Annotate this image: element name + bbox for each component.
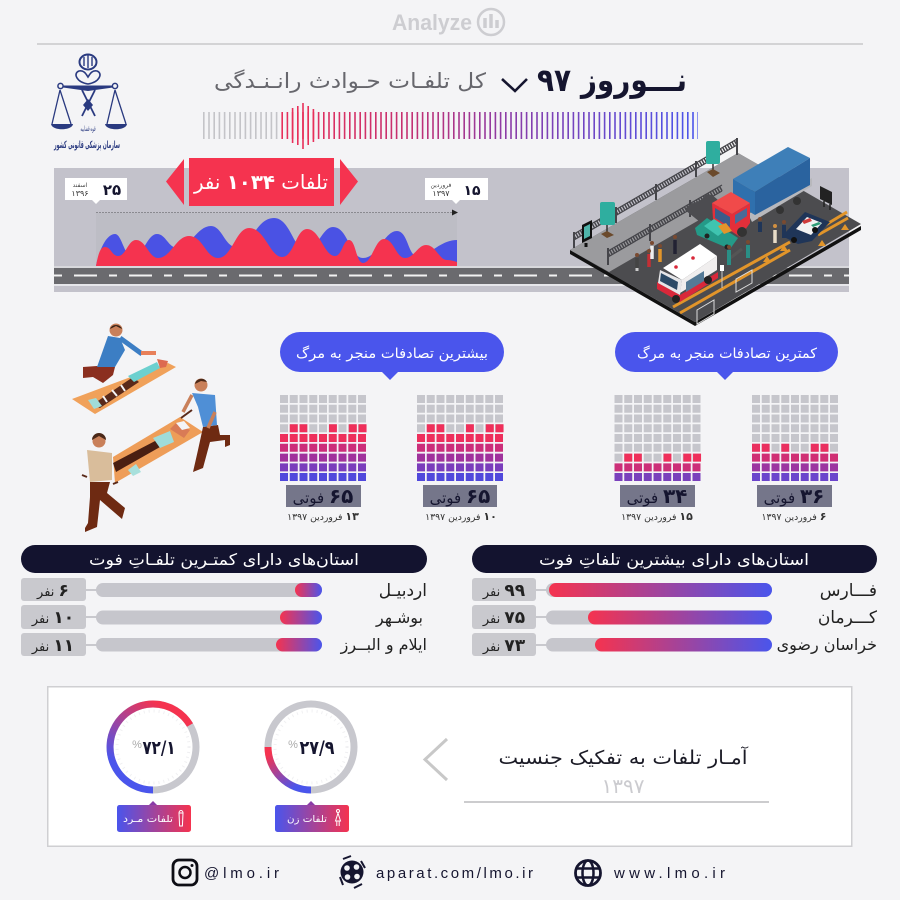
stat box: 65 deaths, 10 farvardin: ۶۵ فوتی — [430, 484, 490, 508]
waffle: 13 farvardin, 65 deaths — [280, 399, 367, 477]
bar chart: lowest provinces: اردبیـل — [379, 581, 427, 601]
donut: women: ۲۷/۹ — [300, 737, 335, 759]
bar chart: highest provinces: ۷۵ نفر — [482, 608, 525, 628]
arrow: chevron left — [425, 739, 447, 780]
bar chart: lowest provinces — [21, 578, 427, 656]
social: aparat: aparat.com/lmo.ir — [376, 865, 533, 882]
bystanders — [635, 258, 639, 268]
tag: men casualties — [117, 801, 191, 832]
heading: provinces with highest deaths: استان‌های دارای بیشترین تلفاتِ فوت — [539, 550, 809, 570]
stat box: 65 deaths, 10 farvardin — [423, 484, 497, 523]
bar chart: lowest provinces: ۶ نفر — [36, 581, 69, 601]
callout: least fatal accidents — [615, 332, 838, 380]
waffle: 10 farvardin, 65 deaths — [417, 399, 504, 477]
donut: women — [268, 704, 354, 790]
ambulance — [657, 272, 718, 302]
tag: women casualties — [275, 801, 349, 832]
icon: chevron down — [502, 79, 527, 91]
date tag: 25 esfand 1396: اسفند — [73, 182, 88, 189]
stat box: 36 deaths, 6 farvardin: ۶ فروردین ۱۳۹۷ — [762, 510, 826, 523]
date tag: 15 farvardin 1397 — [425, 178, 488, 204]
police car — [782, 212, 830, 244]
date tag: 25 esfand 1396 — [65, 178, 127, 204]
bar chart: highest provinces: ۹۹ نفر — [482, 581, 526, 601]
date tag: 15 farvardin 1397: ۱۳۹۷ — [432, 189, 450, 198]
tag: women casualties: تلفات زن — [287, 814, 327, 825]
bar chart: highest provinces: ۷۳ نفر — [482, 636, 526, 656]
date tag: 15 farvardin 1397: ۱۵ — [463, 183, 481, 199]
teal car — [695, 218, 738, 249]
donut: men: % — [132, 739, 142, 751]
date tag: 15 farvardin 1397: فروردین — [431, 182, 452, 189]
stat box: 36 deaths, 6 farvardin — [757, 484, 832, 523]
bar chart: lowest provinces: بوشـهر — [375, 608, 423, 628]
stat box: 65 deaths, 13 farvardin — [286, 484, 361, 523]
heading: provinces with lowest deaths — [21, 545, 427, 573]
waveform — [203, 103, 698, 149]
stat box: 34 deaths, 15 farvardin — [620, 484, 695, 523]
stat box: 36 deaths, 6 farvardin: ۳۶ فوتی — [764, 484, 824, 508]
bar chart: highest provinces: خراسان رضوی — [777, 635, 877, 655]
tree signs — [706, 141, 720, 164]
responders — [760, 222, 784, 238]
stat box: 65 deaths, 10 farvardin: ۱۰ فروردین ۱۳۹۷ — [425, 510, 497, 523]
social: aparat — [340, 856, 533, 888]
brand: Analyze: Analyze — [392, 10, 472, 35]
panel: gender breakdown — [48, 687, 852, 846]
callout: most fatal accidents — [280, 332, 504, 380]
illustration: medic kneeling over patient on board — [72, 324, 176, 414]
social: instagram: @lmo.ir — [204, 865, 279, 882]
banner: total casualties: تلفات ۱۰۳۴ نفر — [193, 170, 328, 194]
heading: provinces with lowest deaths: استان‌های دارای کمتـرین تلفـاتِ فوت — [89, 550, 359, 570]
stat box: 34 deaths, 15 farvardin: ۳۴ فوتی — [627, 484, 687, 508]
waffle: 15 farvardin, 34 deaths — [614, 399, 702, 477]
logo: legal medicine organization: قوه قضاییه — [80, 125, 96, 133]
road sign — [721, 268, 723, 288]
stat box: 34 deaths, 15 farvardin: ۱۵ فروردین ۱۳۹۷ — [621, 510, 693, 523]
title: نـــوروز ۹۷ — [537, 61, 687, 99]
section title: gender statistics — [464, 745, 769, 802]
illustration: isometric road accident — [570, 138, 861, 326]
section title: gender statistics: آمـار تلفات به تفکیک جنسیت — [498, 745, 748, 769]
banner: total casualties — [166, 158, 358, 206]
social: website — [576, 860, 725, 886]
social: instagram — [173, 860, 279, 885]
bar chart: lowest provinces: ۱۱ نفر — [31, 636, 74, 656]
stat box: 65 deaths, 13 farvardin: ۶۵ فوتی — [293, 484, 353, 508]
medics and stretcher — [729, 249, 742, 259]
stat box: 65 deaths, 13 farvardin: ۱۳ فروردین ۱۳۹۷ — [287, 510, 359, 523]
chart: daily casualties area waves — [96, 218, 457, 266]
callout: most fatal accidents: بیشترین تصادفات منجر به مرگ — [296, 344, 488, 362]
waffle: 6 farvardin, 36 deaths — [752, 399, 839, 477]
panel: road band — [54, 168, 849, 292]
bar chart: lowest provinces: ایلام و البــرز — [340, 635, 427, 655]
axis arrow — [96, 210, 458, 216]
donut: men: ۷۲/۱ — [142, 737, 176, 759]
tag: men casualties: تلفات مـرد — [123, 814, 173, 825]
heading: provinces with highest deaths — [472, 545, 877, 573]
donut: men — [110, 704, 196, 790]
donut: women: % — [288, 739, 298, 751]
social: website: www.lmo.ir — [613, 865, 725, 882]
subtitle: کل تلفـات حـوادث رانـنـدگی — [214, 69, 486, 93]
logo: legal medicine organization — [51, 54, 127, 151]
callout: least fatal accidents: کمترین تصادفات منجر به مرگ — [637, 344, 817, 362]
truck — [748, 178, 812, 222]
bar chart: highest provinces: کـــرمان — [818, 608, 878, 628]
text: سازمان پزشکی قانونی کشور — [54, 140, 120, 151]
date tag: 25 esfand 1396: ۱۳۹۶ — [71, 189, 89, 198]
bar chart: lowest provinces: ۱۰ نفر — [31, 608, 74, 628]
date tag: 25 esfand 1396: ۲۵ — [103, 181, 121, 199]
illustration: two men carrying stretcher — [82, 378, 230, 532]
bar chart: highest provinces — [472, 578, 878, 656]
bar chart: highest provinces: فـــارس — [820, 581, 877, 601]
section title: gender statistics: ۱۳۹۷ — [602, 774, 645, 798]
